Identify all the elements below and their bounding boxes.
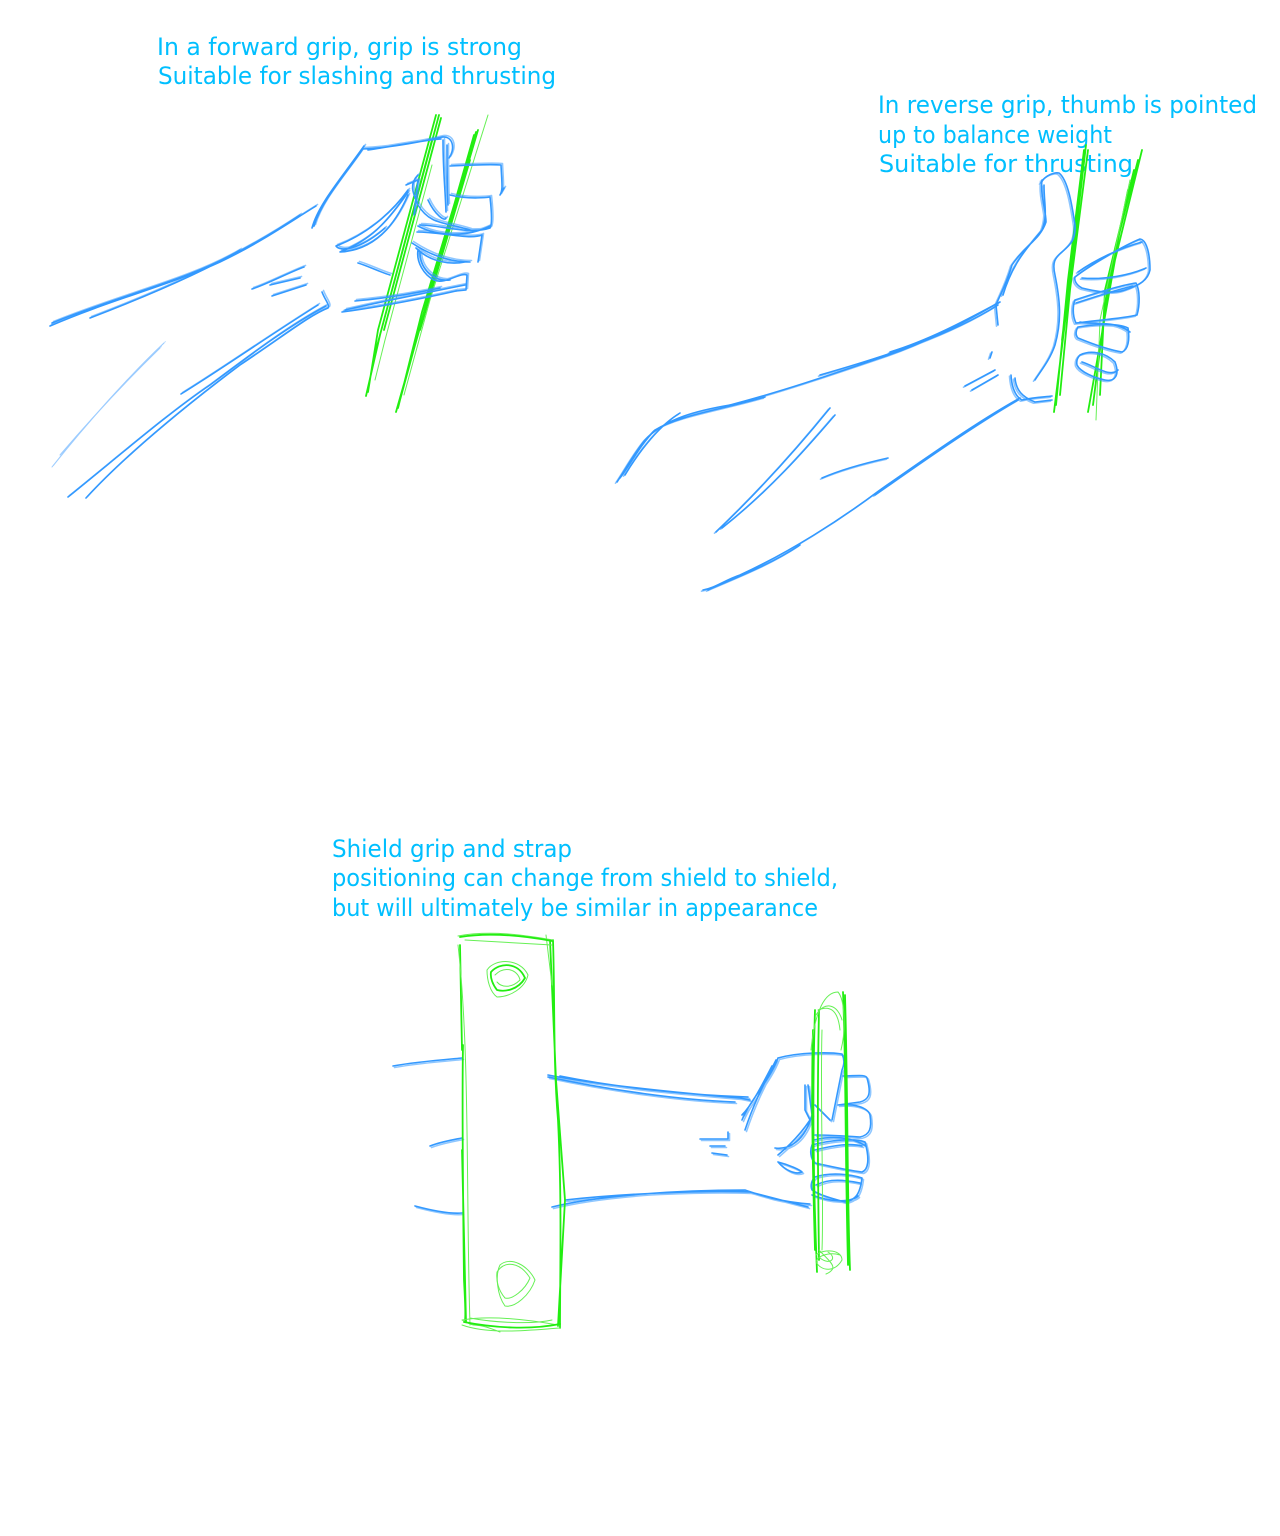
reverse grip arm outline [617,173,1150,590]
text: reverse grip note: Suitable for thrusting [879,150,1133,178]
strap rivet: top [487,962,528,997]
text: forward grip note [157,33,556,90]
text: reverse grip note: In reverse grip, thumb is pointed [878,91,1257,119]
text: reverse grip note [878,91,1257,178]
text: forward grip note: In a forward grip, grip is strong [157,33,522,61]
shield arm outline [393,1053,871,1213]
shield arm sketch overlay [394,1054,872,1215]
strap rivet: bottom [497,1261,535,1306]
illustration: forward grip arm and weapon [50,115,506,498]
text: forward grip note: Suitable for slashing and thrusting [158,62,556,90]
forward grip arm outline [50,137,504,498]
illustration: shield arm, hand and grip [393,933,872,1332]
text: shield grip note: Shield grip and strap [332,835,572,863]
text: shield grip note: but will ultimately be similar in appearance [332,894,818,922]
forward grip arm sketch overlay [52,135,506,496]
text: reverse grip note: up to balance weight [878,121,1112,149]
text: shield grip note [332,835,838,922]
weapon shaft: forward grip [366,115,488,412]
text: shield grip note: positioning can change from shield to shield, [332,864,838,892]
weapon grip [811,992,850,1274]
weapon shaft: reverse grip [1054,145,1142,420]
shield plate [458,933,565,1332]
illustration: reverse grip arm and weapon [616,145,1150,591]
reverse grip arm sketch overlay [616,174,1148,591]
